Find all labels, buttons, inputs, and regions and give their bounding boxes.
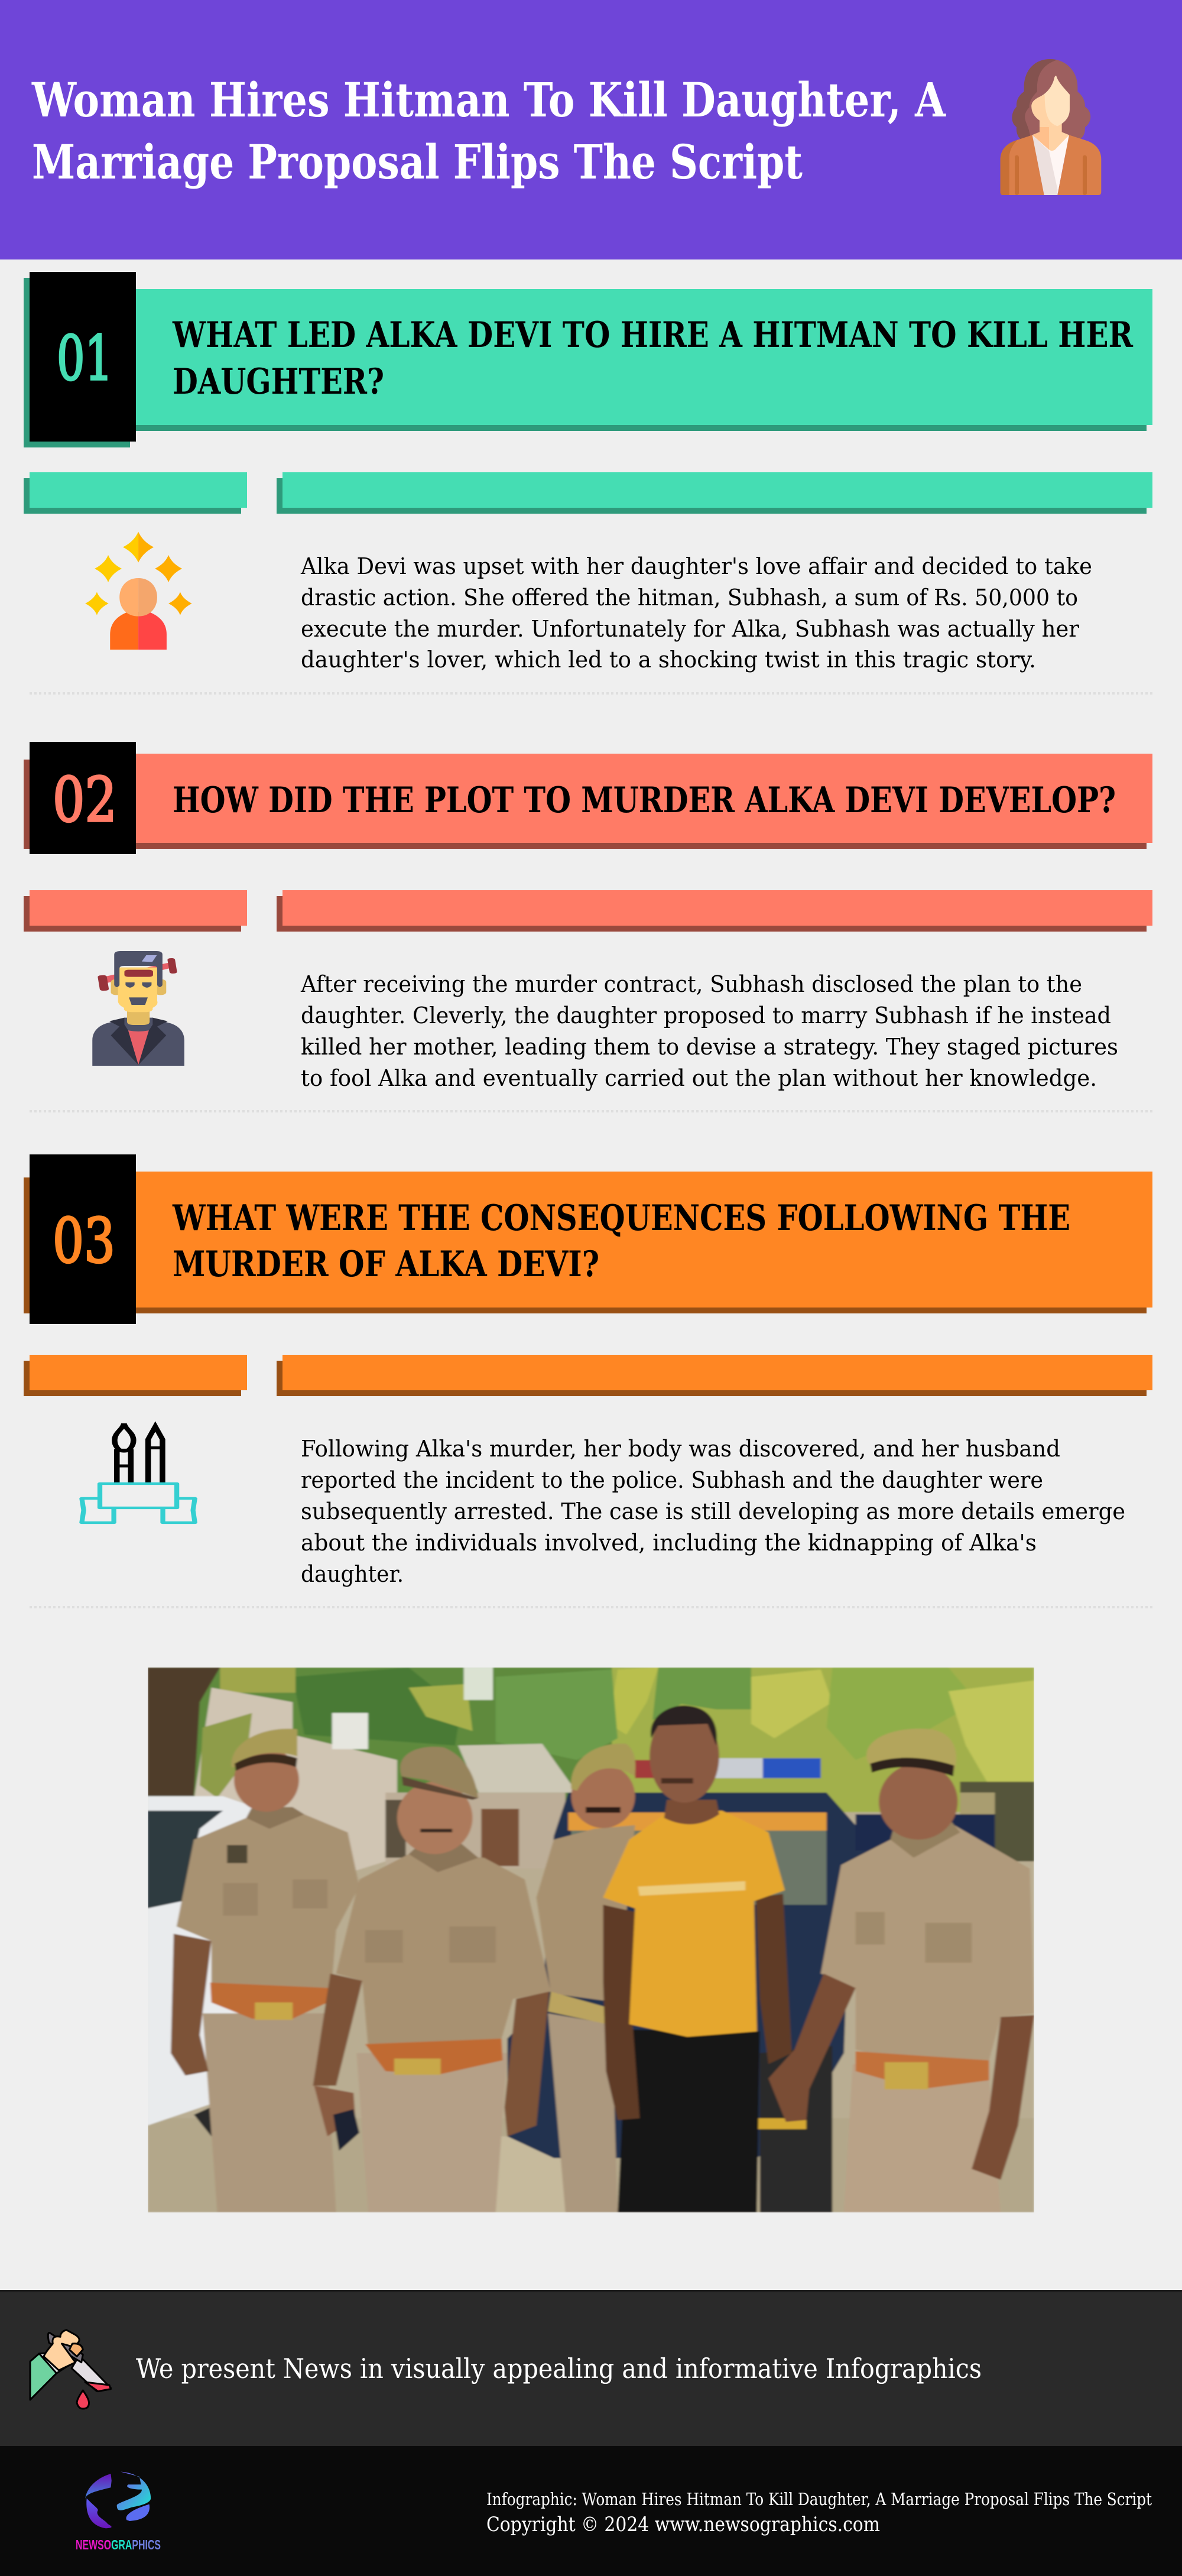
section 1: body text: Alka Devi was upset with her daughter's love affair and decided to take [300, 553, 1092, 579]
number badge 01 [30, 272, 136, 442]
section 1: body text: daughter's lover, which led to a shocking twist in this tragic story. [301, 647, 1036, 673]
officer 1 left [171, 1729, 359, 2212]
footer band [0, 2446, 1182, 2576]
officer 3 behind [537, 1744, 635, 2212]
icon: paintbrushes and banner [82, 1423, 195, 1523]
tagline band [0, 2290, 1182, 2446]
section 1: body text: drastic action. She offered the hitman, Subhash, a sum of Rs. 50,000 to [301, 585, 1078, 611]
section 3: heading band [24, 1154, 1152, 1324]
section 3: body text: Following Alka's murder, her body was discovered, and her husband [301, 1436, 1060, 1462]
heading 3 [172, 1198, 1070, 1285]
title: Woman Hires Hitman To Kill Daughter, A [31, 72, 946, 128]
section 2: heading band [24, 742, 1152, 854]
section 1: accent bars [24, 472, 1152, 514]
icon: hand holding bloody knife [30, 2330, 111, 2409]
number badge 03: 03 [53, 1205, 115, 1277]
logo wordmark: NEWSOGRAPHICS [76, 2537, 161, 2552]
heading 3: MURDER OF ALKA DEVI? [173, 1244, 599, 1285]
section 2: body text [300, 971, 1118, 1091]
section 3: body text: reported the incident to the police. Subhash and the daughter were [301, 1467, 1043, 1493]
section 1: body text: execute the murder. Unfortunately for Alka, Subhash was actually her [301, 616, 1080, 642]
tagline text: We present News in visually appealing and informative Infographics [136, 2353, 982, 2384]
heading 1: DAUGHTER? [173, 361, 384, 403]
section 3: accent bars [24, 1355, 1152, 1396]
section 3: body text: about the individuals involved, including the kidnapping of Alka's [301, 1530, 1037, 1556]
title: Marriage Proposal Flips The Script [32, 134, 803, 190]
icon: frankenstein monster [92, 951, 184, 1066]
copyright line: Copyright © 2024 www.newsographics.com [486, 2513, 880, 2536]
section 2: body text: daughter. Cleverly, the daughter proposed to marry Subhash if he instead [301, 1003, 1111, 1029]
icon: person with sparkles [85, 532, 192, 650]
section 2: body text: killed her mother, leading them to devise a strategy. They staged pictures [301, 1034, 1118, 1060]
number badge 02 [30, 742, 136, 854]
section 3: body text [301, 1436, 1125, 1587]
section 2: body text: After receiving the murder contract, Subhash disclosed the plan to the [300, 971, 1082, 997]
arrested man in yellow t-shirt [603, 1705, 792, 2212]
section 1: body text [300, 553, 1092, 673]
number badge 02: 02 [53, 764, 117, 836]
title [31, 72, 946, 190]
heading 1 [172, 314, 1134, 403]
number badge 01: 01 [57, 322, 113, 394]
number badge 03 [30, 1154, 136, 1324]
section 2: body text: to fool Alka and eventually carried out the plan without her knowledge. [301, 1065, 1097, 1091]
section 2: accent bars [24, 890, 1152, 932]
section 1: heading band [24, 272, 1152, 447]
officer 4 right [768, 1728, 1034, 2212]
icon: woman in orange blazer [1001, 59, 1101, 195]
section 3: body text: daughter. [301, 1561, 404, 1587]
section 3: body text: subsequently arrested. The case is still developing as more details emerge [301, 1498, 1125, 1524]
photo: police officers with arrested man [148, 1667, 1034, 2212]
logo mark [85, 2472, 151, 2528]
officer 2 centre-left [313, 1747, 551, 2212]
header banner [0, 0, 1182, 259]
